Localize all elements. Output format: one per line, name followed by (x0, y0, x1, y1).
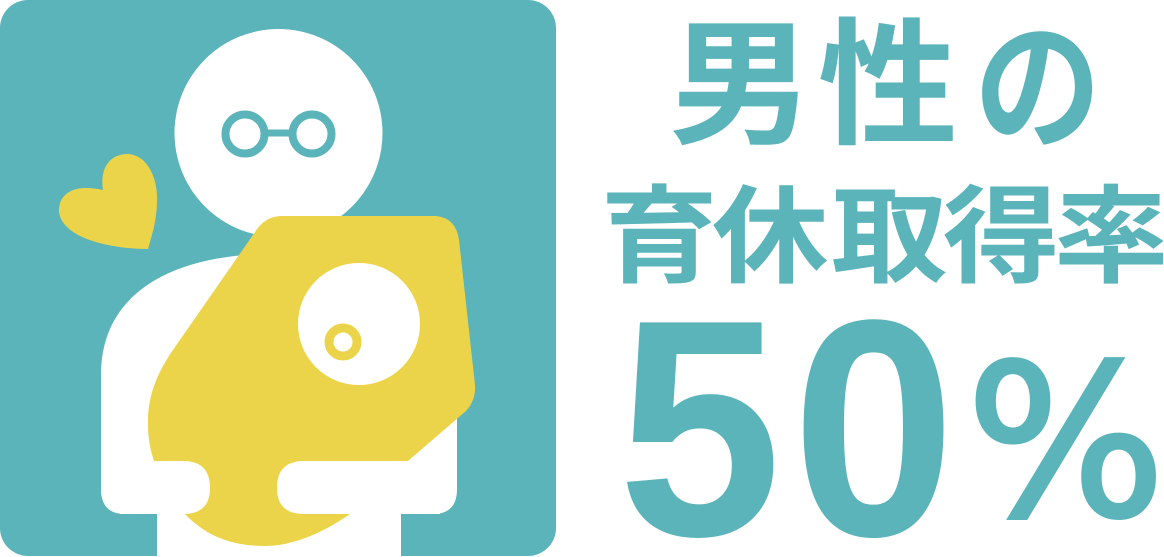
father head (174, 29, 382, 237)
baby body (148, 216, 475, 546)
heading: 男性の: の (974, 8, 1101, 169)
baby head (298, 263, 420, 385)
baby eye (329, 328, 357, 356)
heading: 育休取得率: 得 (943, 178, 1060, 297)
heading: 男性の: 男 (669, 9, 813, 162)
heading: 育休取得率 (601, 178, 1164, 297)
panel: teal illustration background (0, 0, 556, 556)
figure: 50% (618, 306, 1164, 551)
heading: 育休取得率: 育 (601, 178, 718, 297)
heading: 育休取得率: 取 (831, 178, 948, 297)
icon: heart (59, 154, 157, 249)
father body (101, 255, 457, 556)
heading: 男性の: 性 (818, 10, 958, 163)
father arm right (277, 461, 440, 514)
glasses (226, 114, 332, 154)
father arm left (120, 461, 210, 514)
heading: 育休取得率: 休 (712, 178, 829, 297)
icon: father holding baby (101, 29, 475, 556)
heading: 男性の (669, 8, 1101, 169)
